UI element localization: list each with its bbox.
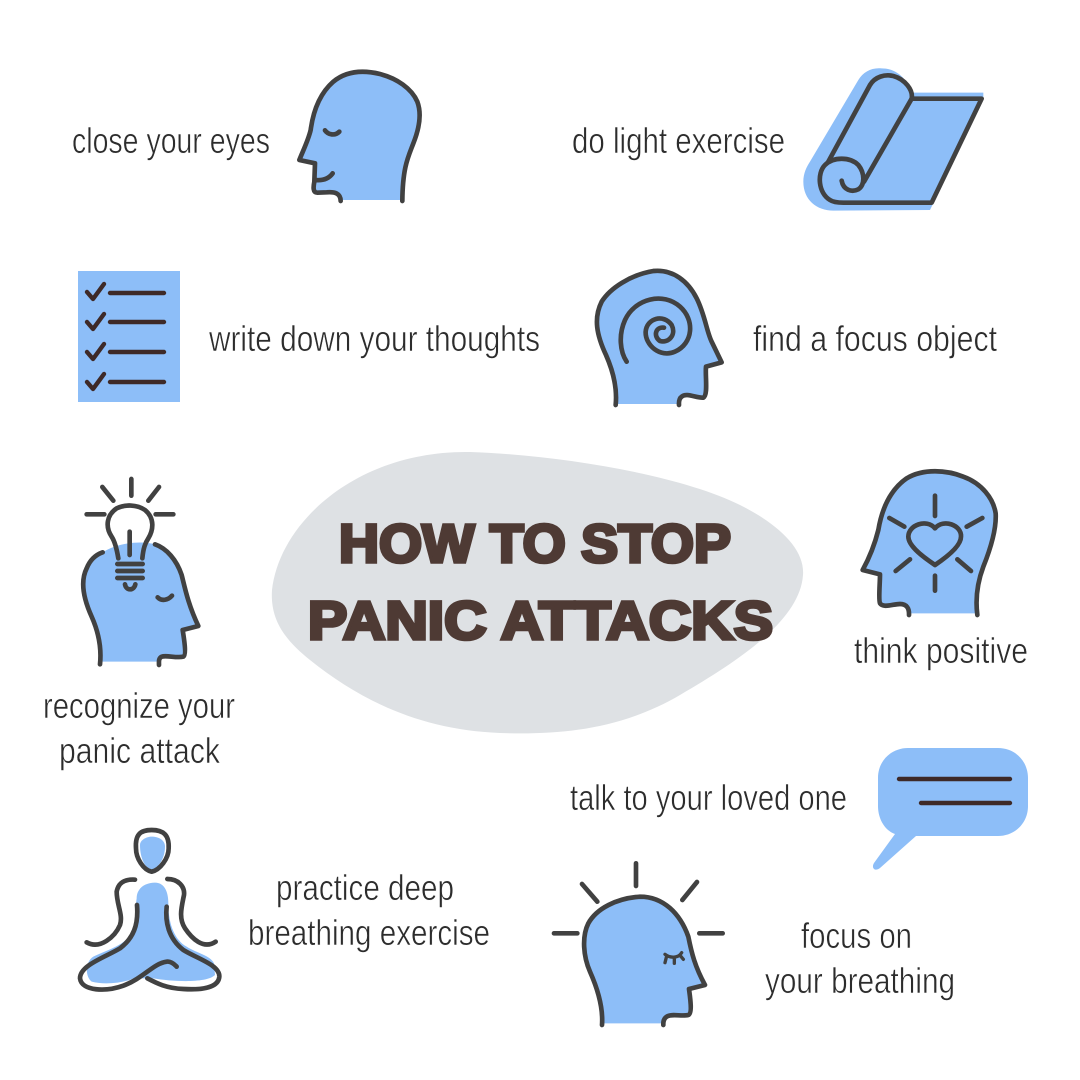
title: HOW TO STOP bbox=[339, 514, 731, 574]
icon: checklist bbox=[78, 271, 180, 402]
label: think positive: think positive bbox=[854, 630, 1028, 671]
icon: head with spiral bbox=[597, 271, 722, 405]
icon: head with eyelashes and rays bbox=[554, 863, 723, 1025]
title: PANIC ATTACKS bbox=[308, 591, 773, 651]
label: focus on your breathing bbox=[765, 915, 955, 1001]
label: find a focus object: find a focus object bbox=[753, 318, 997, 359]
label: recognize your panic attack bbox=[43, 685, 235, 771]
label: practice deep breathing exercise bbox=[248, 867, 490, 953]
icon: meditating person bbox=[80, 830, 219, 990]
label: recognize your panic attack: panic attack bbox=[59, 730, 221, 771]
icon: exercise mat bbox=[803, 68, 983, 211]
icon: head with closed eye bbox=[299, 72, 420, 201]
central blob with title bbox=[272, 452, 803, 733]
title bbox=[308, 514, 773, 651]
label: write down your thoughts: write down your thoughts bbox=[208, 318, 540, 359]
label: close your eyes: close your eyes bbox=[72, 120, 270, 161]
label: practice deep breathing exercise: practice deep bbox=[276, 867, 454, 908]
icon: head with light bulb bbox=[83, 479, 198, 665]
label: practice deep breathing exercise: breathing exercise bbox=[248, 912, 490, 953]
label: focus on your breathing: your breathing bbox=[765, 960, 955, 1001]
label: do light exercise: do light exercise bbox=[572, 120, 785, 161]
label: recognize your panic attack: recognize your bbox=[43, 685, 235, 726]
label: focus on your breathing: focus on bbox=[801, 915, 912, 956]
icon: head with heart bbox=[863, 471, 996, 615]
label: talk to your loved one: talk to your loved one bbox=[570, 777, 847, 818]
icon: speech bubble bbox=[873, 748, 1028, 870]
